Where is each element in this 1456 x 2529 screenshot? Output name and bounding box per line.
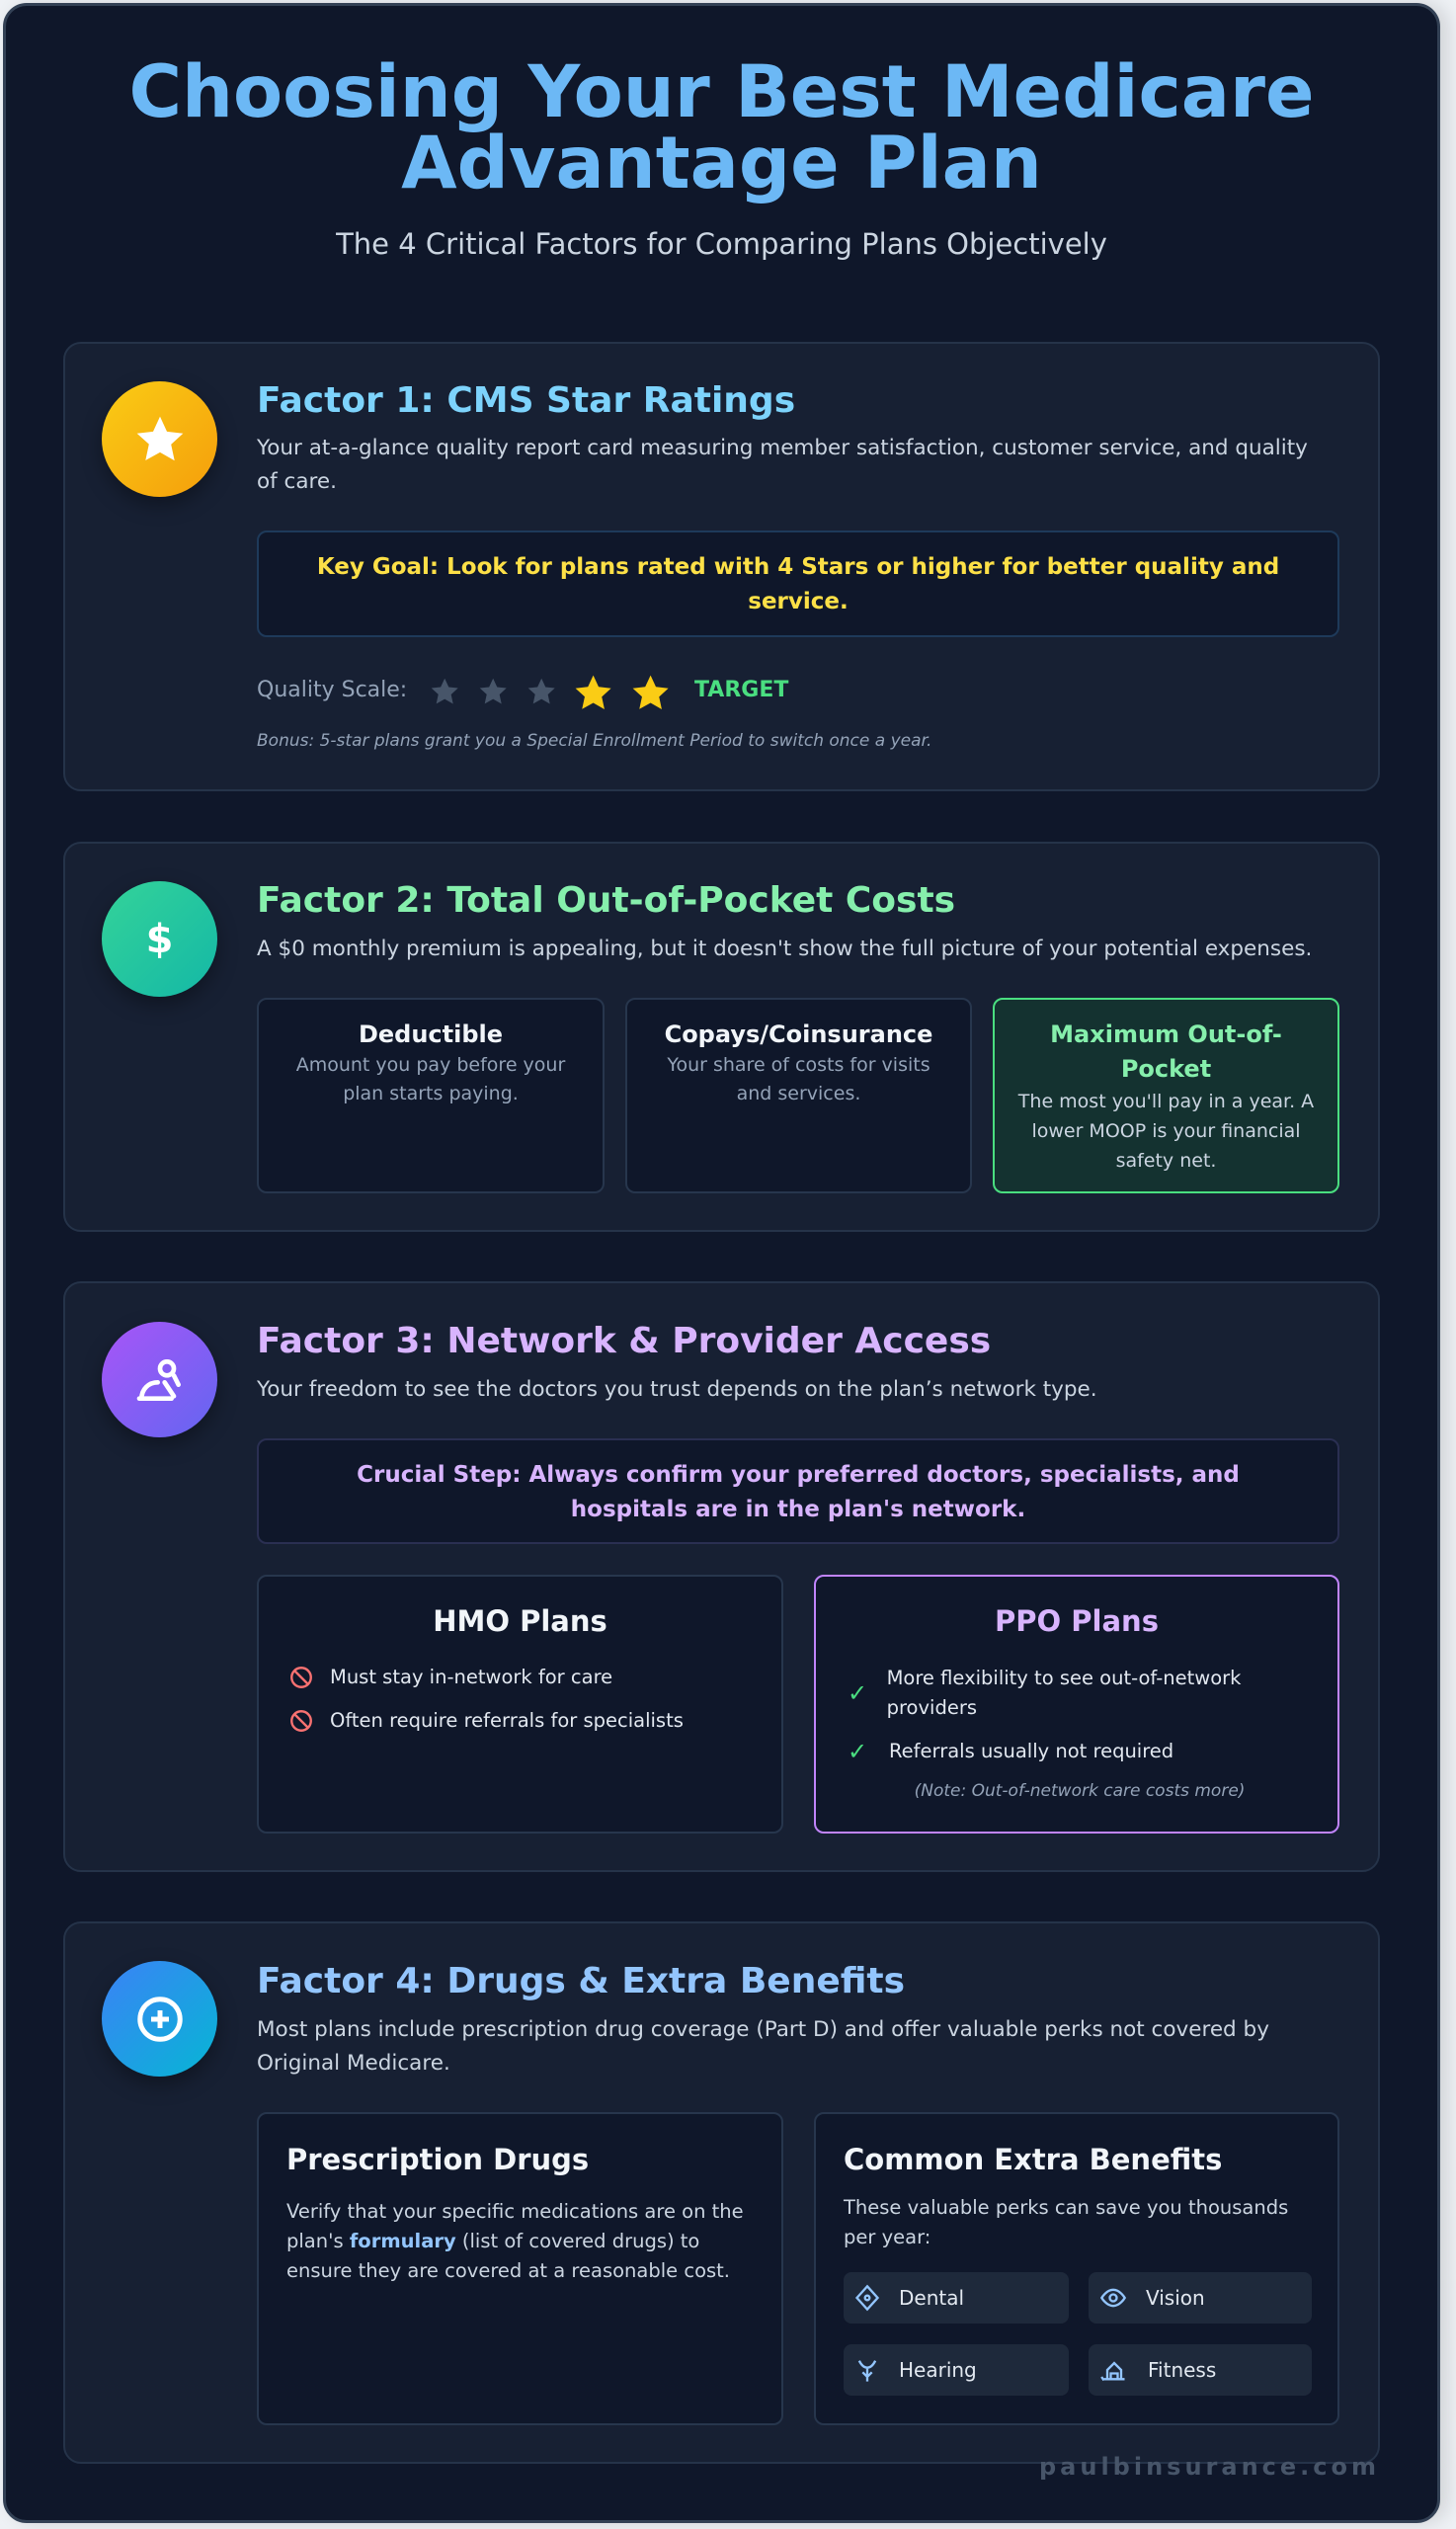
heading factor 4: Factor 4: Drugs & Extra Benefits xyxy=(257,1961,905,2001)
panel: factor 1 xyxy=(63,342,1380,791)
chip: vision: Vision xyxy=(1146,2286,1205,2310)
box: copays xyxy=(625,998,972,1193)
heading factor 1: Factor 1: CMS Star Ratings xyxy=(257,380,795,421)
box: HMO xyxy=(257,1575,783,1834)
title: Advantage Plan xyxy=(401,122,1042,205)
callout: crucial step xyxy=(257,1438,1339,1544)
PPO list: ✓ xyxy=(848,1738,867,1765)
box: prescription drugs: Prescription Drugs xyxy=(286,2143,589,2176)
description factor 3: Your freedom to see the doctors you trust depends on the plan’s network type. xyxy=(257,1377,1097,1402)
subtitle: The 4 Critical Factors for Comparing Plans Objectively xyxy=(336,227,1107,261)
panel: factor 4 xyxy=(63,1921,1380,2464)
chip: vision xyxy=(1089,2272,1312,2324)
heading factor 2: Factor 2: Total Out-of-Pocket Costs xyxy=(257,880,955,921)
chip: dental xyxy=(844,2272,1069,2324)
box: deductible: Deductible xyxy=(359,1020,503,1048)
icon: star xyxy=(102,381,217,497)
box: copays: Your share of costs for visits and services. xyxy=(667,1054,930,1104)
box: copays: Copays/Coinsurance xyxy=(665,1020,932,1048)
chip: fitness: Fitness xyxy=(1148,2358,1216,2382)
icon: plus xyxy=(102,1961,217,2077)
chip: hearing xyxy=(844,2344,1069,2396)
footer: website: paulbinsurance.com xyxy=(1039,2453,1380,2481)
box: PPO xyxy=(814,1575,1339,1834)
PPO list: Referrals usually not required xyxy=(889,1740,1173,1762)
chip: hearing: Hearing xyxy=(899,2358,977,2382)
HMO list xyxy=(290,1666,684,1732)
description factor 2: A $0 monthly premium is appealing, but it doesn't show the full picture of your potential expenses. xyxy=(257,937,1312,961)
box: MOOP: The most you'll pay in a year. A lower MOOP is your financial safety net. xyxy=(1018,1091,1314,1172)
box: extra benefits xyxy=(814,2112,1339,2425)
chip: dental: Dental xyxy=(899,2286,964,2310)
quality scale row: TARGET xyxy=(694,678,788,702)
HMO list: Must stay in-network for care xyxy=(330,1666,612,1688)
title: Choosing Your Best Medicare xyxy=(128,50,1315,134)
chip: fitness xyxy=(1089,2344,1312,2396)
quality scale row: Quality Scale: xyxy=(257,678,407,702)
title xyxy=(128,50,1315,205)
HMO list: Often require referrals for specialists xyxy=(330,1709,684,1732)
box: MOOP: Maximum Out-of-Pocket xyxy=(1050,1020,1282,1083)
PPO list: More flexibility to see out-of-network providers xyxy=(887,1667,1241,1719)
PPO list xyxy=(848,1667,1245,1801)
PPO list: (Note: Out-of-network care costs more) xyxy=(915,1781,1245,1801)
quality scale row xyxy=(257,676,788,709)
box: deductible xyxy=(257,998,605,1193)
box: prescription drugs: Verify that your specific medications are on the plan's formulary (list of covered drugs) to ensure they are covered at a reasonable cost. xyxy=(286,2200,744,2282)
description factor 1: Your at-a-glance quality report card measuring member satisfaction, customer service, and quality of care. xyxy=(257,436,1308,494)
PPO list: ✓ xyxy=(848,1679,867,1707)
icon: dollar xyxy=(102,881,217,997)
description factor 4: Most plans include prescription drug coverage (Part D) and offer valuable perks not covered by Original Medicare. xyxy=(257,2017,1269,2076)
callout: key goal xyxy=(257,530,1339,637)
box: extra benefits: These valuable perks can save you thousands per year: xyxy=(844,2196,1288,2248)
HMO title: HMO Plans xyxy=(433,1604,607,1638)
icon: dollar: $ xyxy=(146,917,173,962)
PPO title: PPO Plans xyxy=(995,1604,1159,1638)
box: MOOP xyxy=(993,998,1339,1193)
box: prescription drugs xyxy=(257,2112,783,2425)
heading factor 3: Factor 3: Network & Provider Access xyxy=(257,1321,991,1361)
callout: key goal: Key Goal: Look for plans rated with 4 Stars or higher for better quality and service. xyxy=(317,554,1279,614)
box: extra benefits: Common Extra Benefits xyxy=(844,2143,1222,2176)
box: deductible: Amount you pay before your plan starts paying. xyxy=(296,1054,565,1104)
bonus note: Bonus: 5-star plans grant you a Special Enrollment Period to switch once a year. xyxy=(257,731,931,751)
panel: factor 3 xyxy=(63,1281,1380,1872)
callout: crucial step: Crucial Step: Always confirm your preferred doctors, specialists, and hospitals are in the plan's network. xyxy=(357,1462,1240,1522)
icon: doctor xyxy=(102,1322,217,1437)
panel: factor 2 xyxy=(63,842,1380,1232)
